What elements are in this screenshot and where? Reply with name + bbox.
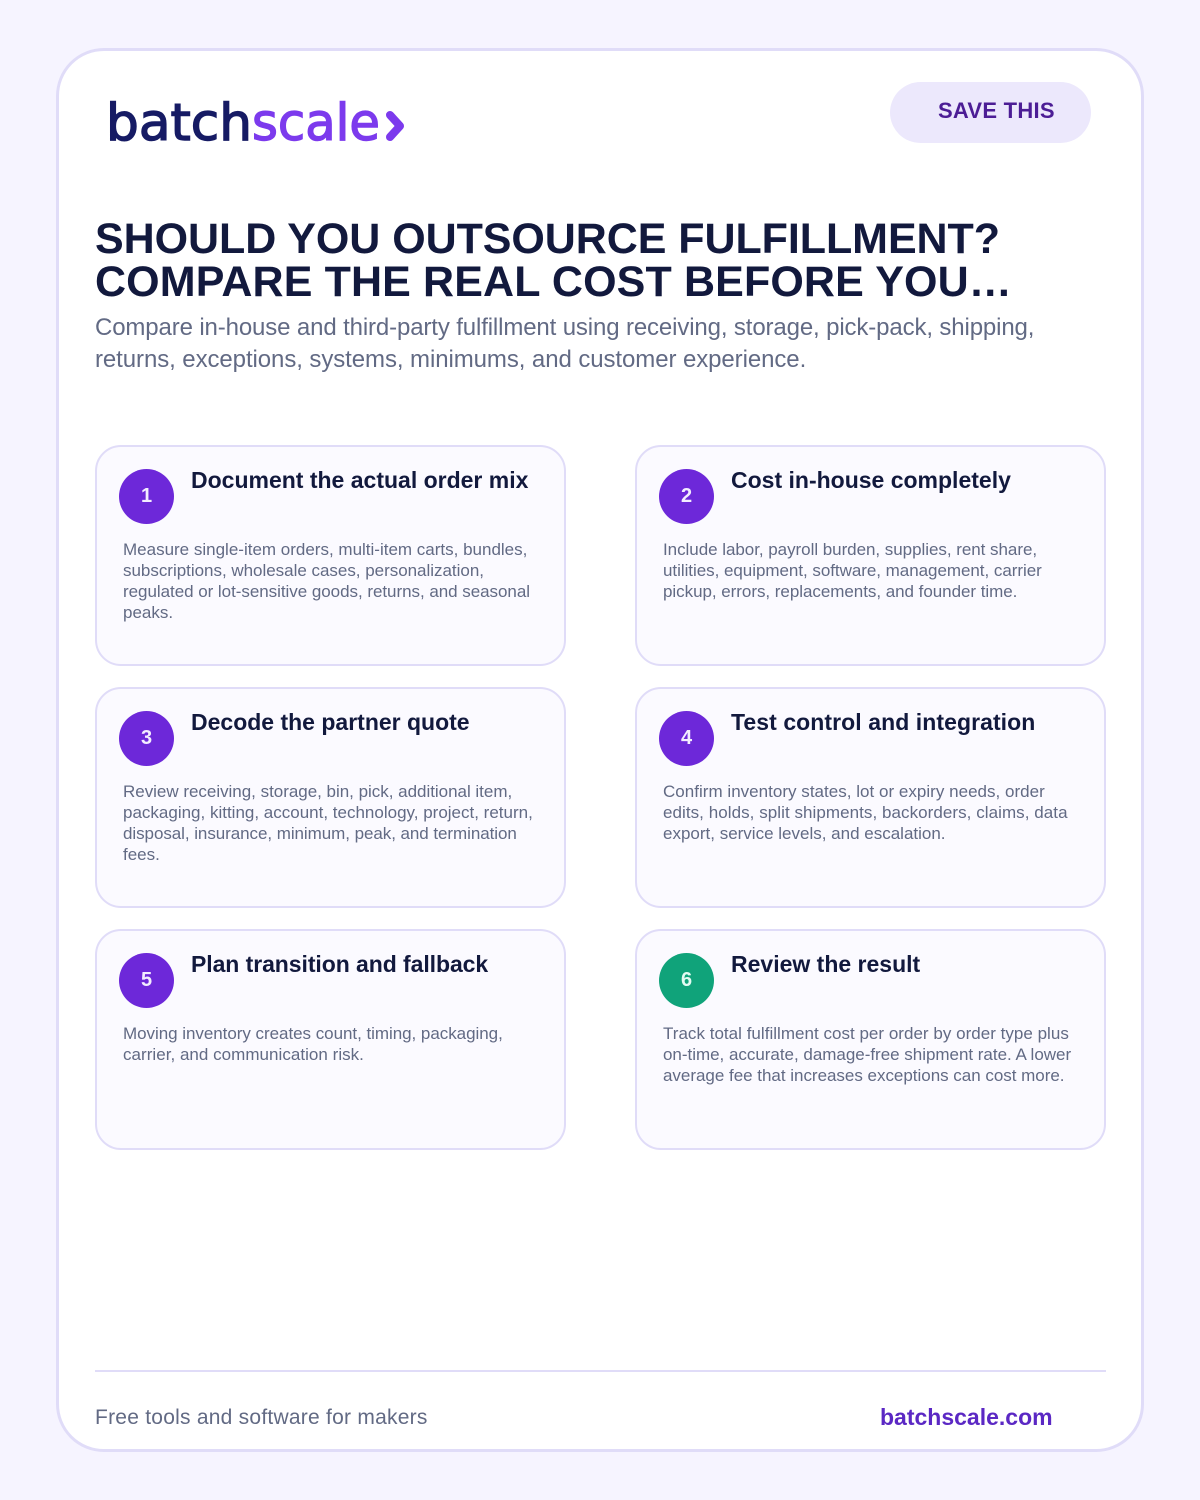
step 3 body (123, 782, 533, 864)
subtitle: Compare in-house and third-party fulfillment using receiving, storage, pick-pack, shipping, (95, 314, 1034, 341)
footer tagline: Free tools and software for makers (95, 1406, 428, 1429)
panel: step 6 (635, 929, 1106, 1150)
step 2 body: utilities, equipment, software, management, carrier (663, 561, 1042, 580)
step 6 body (663, 1024, 1071, 1085)
step 2 body: Include labor, payroll burden, supplies, rent share, (663, 540, 1037, 559)
step 4 heading: Test control and integration (731, 709, 1035, 735)
logo: batchscale: scale (252, 94, 380, 153)
step 5 number (119, 953, 174, 1008)
step 1 body (123, 540, 530, 622)
step 4 body: edits, holds, split shipments, backorders, claims, data (663, 803, 1068, 822)
step 3 heading: Decode the partner quote (191, 709, 470, 735)
step 1 body: regulated or lot-sensitive goods, returns, and seasonal (123, 582, 530, 601)
subtitle (95, 314, 1034, 373)
step 3 body: disposal, insurance, minimum, peak, and termination (123, 824, 517, 843)
step 4 number: 4 (681, 727, 692, 749)
step 1 heading: Document the actual order mix (191, 467, 528, 493)
step 2 number: 2 (681, 485, 692, 507)
step 2 heading: Cost in-house completely (731, 467, 1011, 493)
logo: batchscale (106, 94, 404, 153)
step 6 body: Track total fulfillment cost per order by order type plus (663, 1024, 1069, 1043)
step 6 number: 6 (681, 969, 692, 991)
step 4 number (659, 711, 714, 766)
step 3 body: fees. (123, 845, 160, 864)
step 2 body (663, 540, 1042, 601)
title: SHOULD YOU OUTSOURCE FULFILLMENT? (95, 215, 1000, 263)
step 2 number (659, 469, 714, 524)
subtitle: returns, exceptions, systems, minimums, and customer experience. (95, 346, 806, 373)
step 5 body (123, 1024, 503, 1064)
step 3 body: packaging, kitting, account, technology, project, return, (123, 803, 533, 822)
step 5 number: 5 (141, 969, 152, 991)
panel: step 1 (95, 445, 566, 666)
panel: step 3 (95, 687, 566, 908)
step 6 heading: Review the result (731, 951, 920, 977)
step 3 body: Review receiving, storage, bin, pick, additional item, (123, 782, 512, 801)
step 3 number (119, 711, 174, 766)
save this badge (890, 82, 1091, 143)
step 1 body: subscriptions, wholesale cases, personalization, (123, 561, 484, 580)
step 5 body: Moving inventory creates count, timing, packaging, (123, 1024, 503, 1043)
step 5 body: carrier, and communication risk. (123, 1045, 364, 1064)
footer url: batchscale.com (880, 1404, 1053, 1430)
step 1 body: Measure single-item orders, multi-item carts, bundles, (123, 540, 527, 559)
step 4 body: export, service levels, and escalation. (663, 824, 946, 843)
step 2 body: pickup, errors, replacements, and founder time. (663, 582, 1017, 601)
title (95, 215, 1012, 306)
panel: step 4 (635, 687, 1106, 908)
step 1 number: 1 (141, 485, 152, 507)
save this badge: SAVE THIS (938, 98, 1055, 123)
step 6 number (659, 953, 714, 1008)
step 3 number: 3 (141, 727, 152, 749)
panel: step 5 (95, 929, 566, 1150)
title: COMPARE THE REAL COST BEFORE YOU… (95, 258, 1012, 306)
panel: step 2 (635, 445, 1106, 666)
step 4 body (663, 782, 1068, 843)
step 1 body: peaks. (123, 603, 173, 622)
logo: batchscale: batch (106, 94, 252, 153)
step 1 number (119, 469, 174, 524)
step 6 body: on-time, accurate, damage-free shipment rate. A lower (663, 1045, 1071, 1064)
step 5 heading: Plan transition and fallback (191, 951, 488, 977)
step 4 body: Confirm inventory states, lot or expiry needs, order (663, 782, 1045, 801)
step 6 body: average fee that increases exceptions can cost more. (663, 1066, 1065, 1085)
